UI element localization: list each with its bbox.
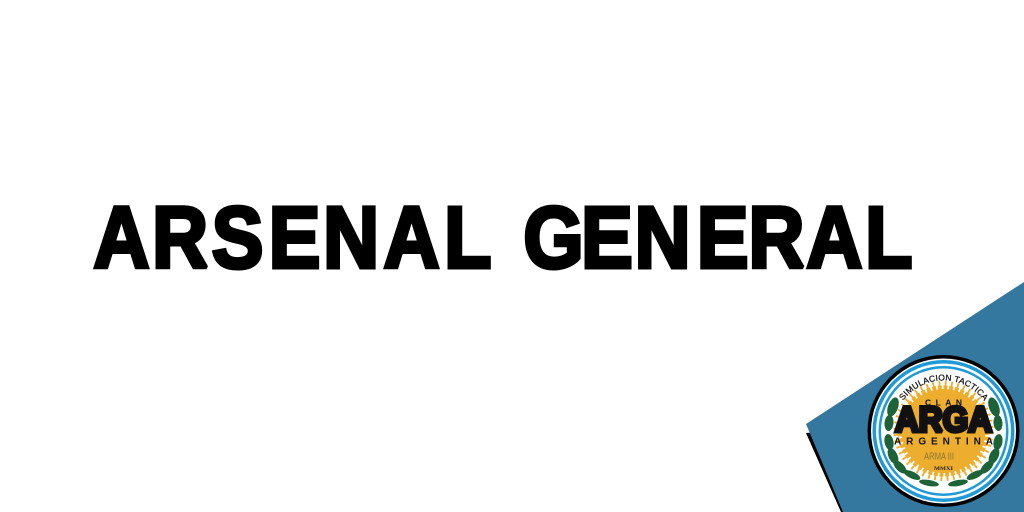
laurel leaves xyxy=(883,396,1004,488)
title: ARSENAL GENERAL xyxy=(93,189,912,286)
argentina text: ARGENTINA xyxy=(894,436,993,448)
mmxi text: MMXI xyxy=(934,466,953,472)
arc text: SIMULACION TACTICA xyxy=(899,374,988,402)
blue corner panel xyxy=(806,282,1024,512)
corner shadow xyxy=(806,432,850,512)
arga logo: ARGA xyxy=(895,400,992,440)
arc backing xyxy=(897,380,990,412)
badge xyxy=(868,355,1020,507)
badge rings xyxy=(868,355,1020,507)
sun xyxy=(896,384,991,478)
arma iii text: ARMA III xyxy=(924,452,954,462)
clan backing xyxy=(922,397,966,407)
clan text: CLAN xyxy=(925,398,962,408)
